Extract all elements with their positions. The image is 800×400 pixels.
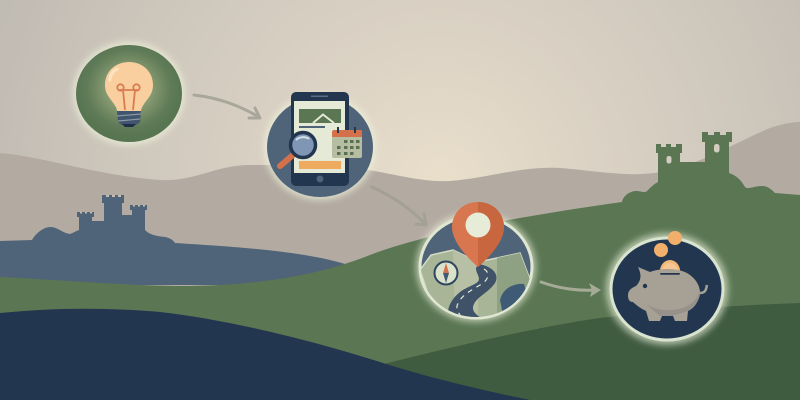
slate hill with left castle: [0, 195, 370, 285]
circle: map badge: [420, 216, 532, 318]
right castle left-tower battlements: [656, 144, 682, 153]
icon: piggy bank: [628, 267, 707, 321]
circle: slate badge: [267, 97, 373, 197]
step 4: savings: [606, 231, 728, 345]
map and road: [421, 249, 530, 317]
dark green foreground hill: [380, 303, 800, 400]
icon: light bulb: [105, 62, 153, 127]
step 1: idea: [73, 42, 185, 146]
icon: calendar: [332, 127, 362, 158]
back hills: [0, 122, 800, 300]
icon: smartphone: [291, 92, 349, 186]
step 2: plan: [264, 92, 376, 200]
navy foreground hill: [0, 309, 530, 400]
right castle windows: [666, 144, 720, 164]
step 3: map: [416, 202, 536, 330]
circle: navy badge: [611, 238, 723, 340]
arrow: plan to map: [372, 187, 426, 225]
icon: coins: [654, 231, 682, 282]
right castle right-tower battlements: [702, 132, 732, 142]
arrow: map to savings: [541, 282, 601, 297]
icon: magnifying glass: [280, 132, 316, 166]
icon: compass: [434, 262, 458, 284]
icon: location pin: [452, 202, 504, 267]
arrow: idea to plan: [194, 95, 260, 118]
circle: green badge: [76, 45, 182, 142]
left castle crenels: [80, 195, 145, 214]
mid green hill with right castle: [0, 132, 800, 400]
